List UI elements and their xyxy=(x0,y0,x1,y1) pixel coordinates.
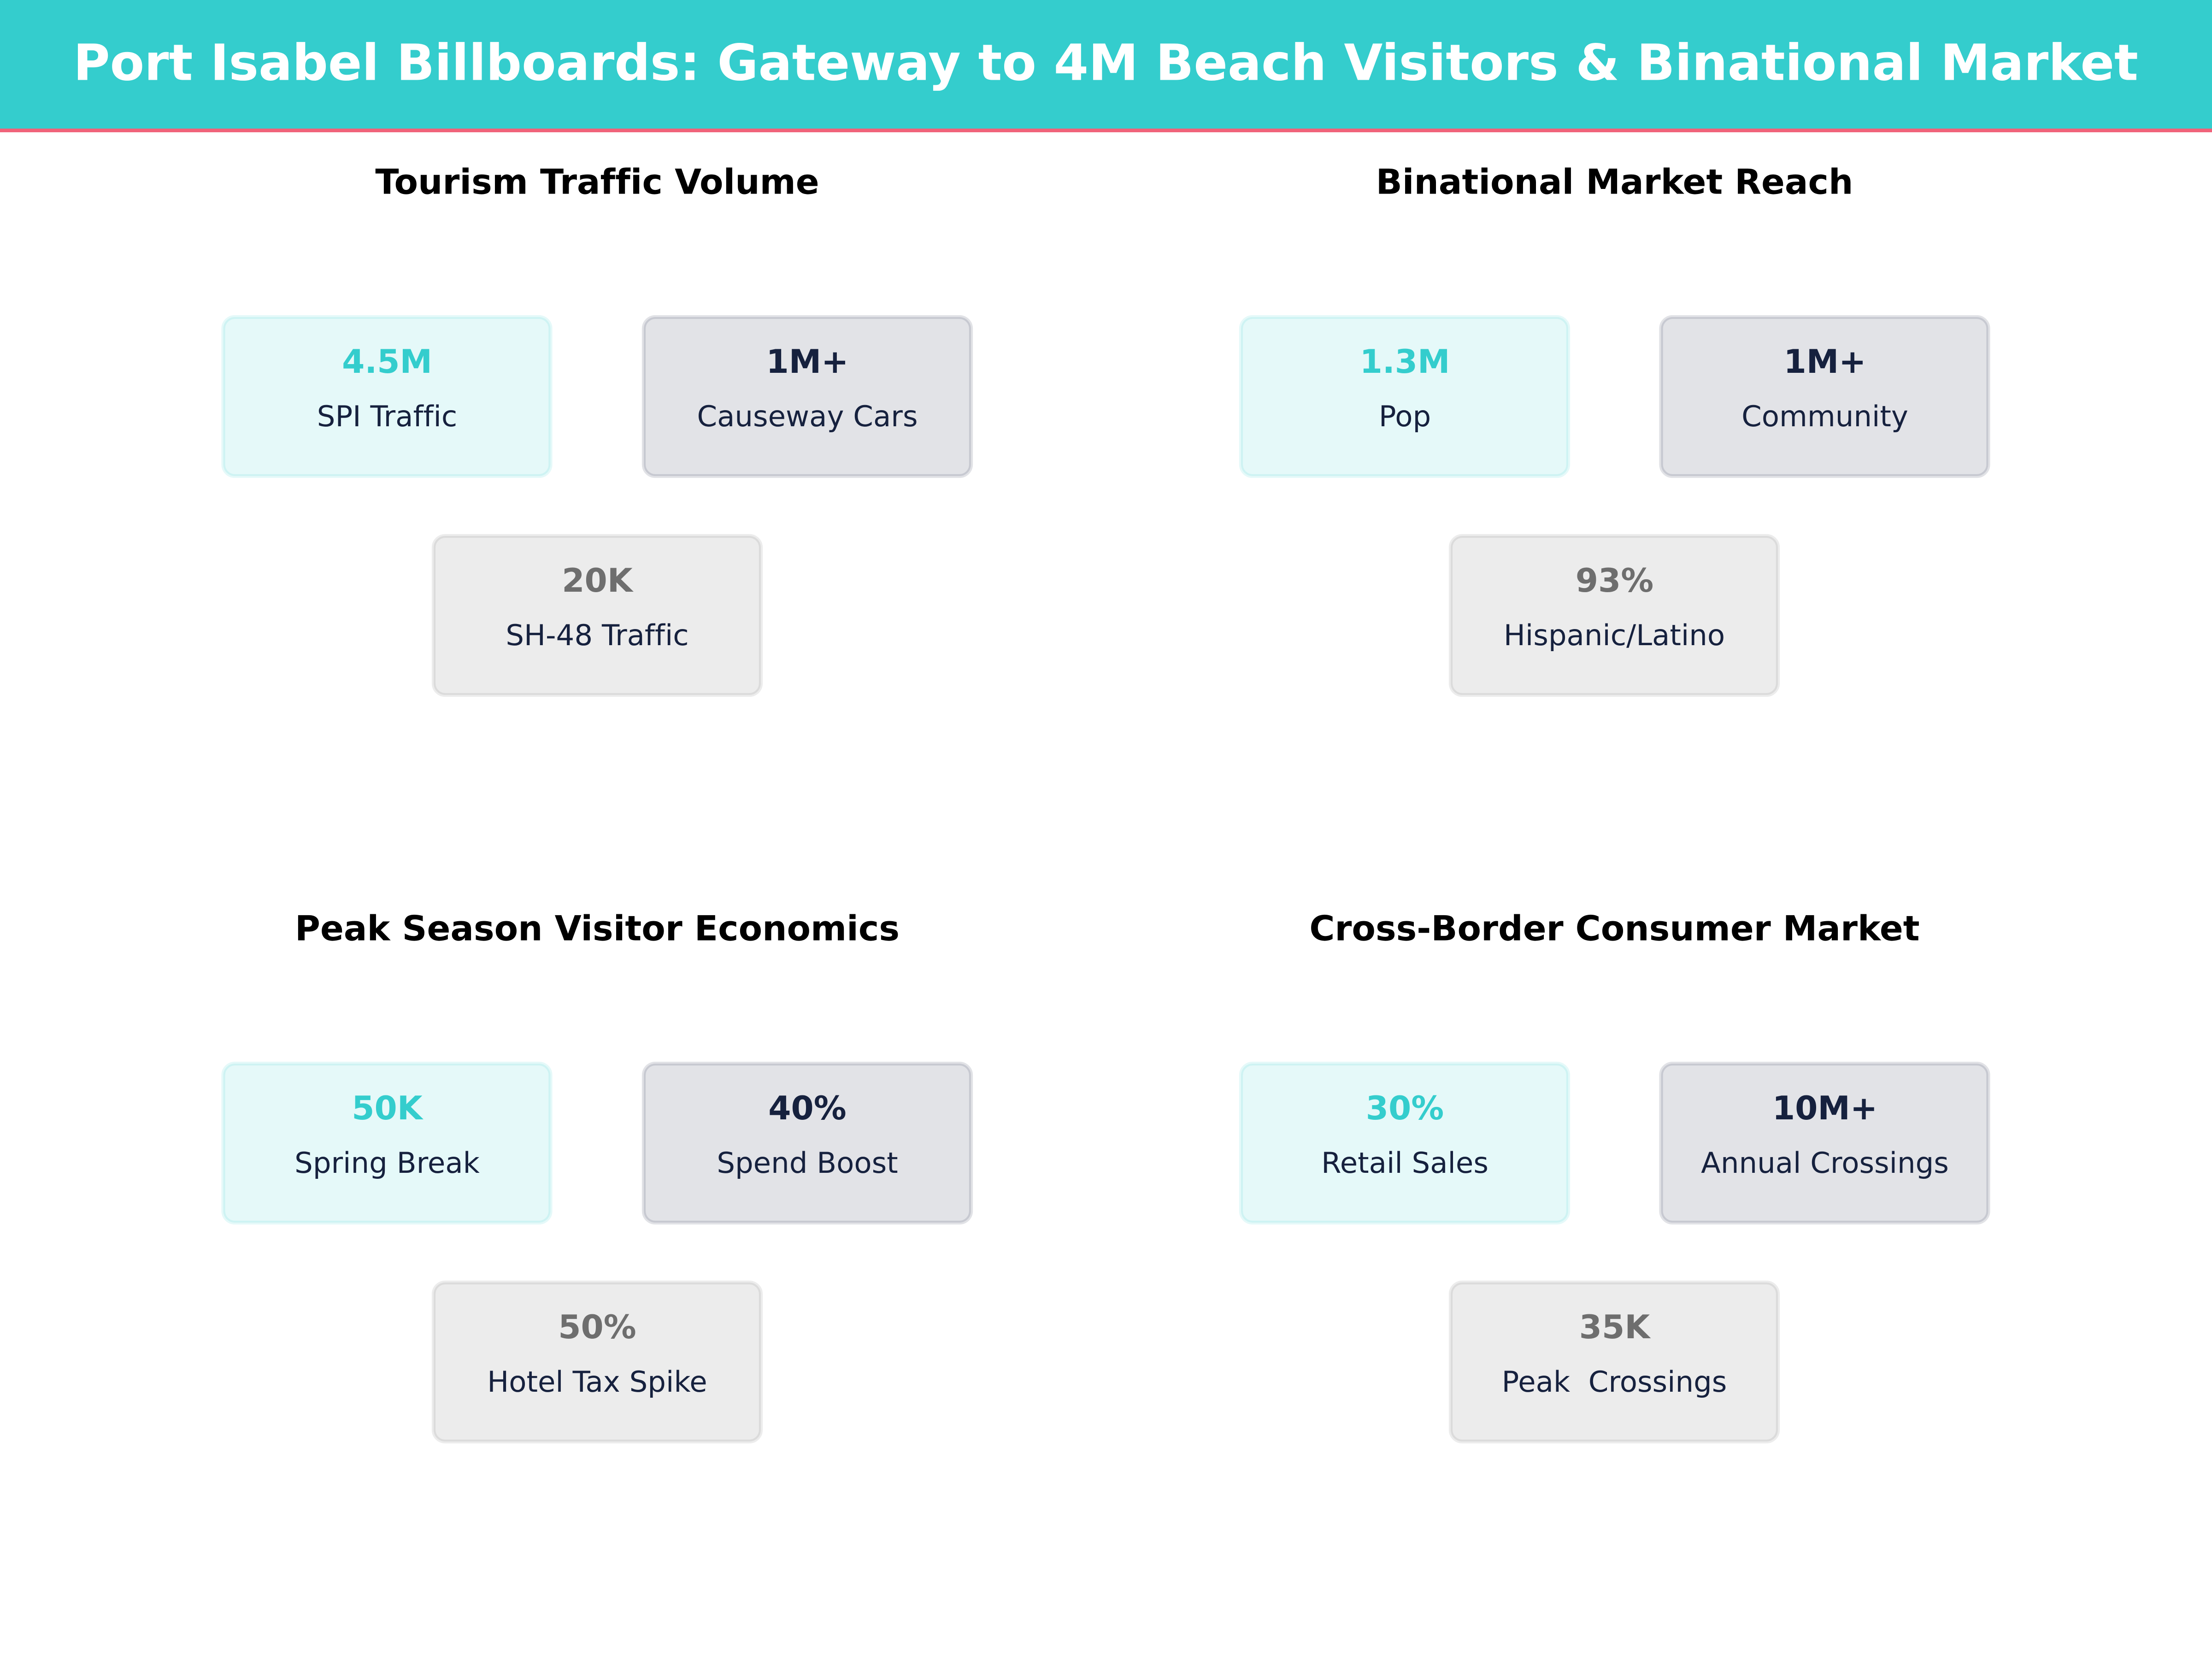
card: retail sales: Retail Sales xyxy=(1321,1146,1488,1180)
card: community: Community xyxy=(1741,400,1908,433)
card: spring break: Spring Break xyxy=(294,1146,480,1180)
heading: peak season visitor economics: Peak Season Visitor Economics xyxy=(295,908,900,949)
card: spring break: 50K xyxy=(352,1089,424,1127)
card: SPI traffic: 4.5M xyxy=(342,342,432,381)
card: hispanic/latino: Hispanic/Latino xyxy=(1504,618,1725,652)
card: SH-48 traffic: 20K xyxy=(562,561,634,600)
card: peak crossings: Peak Crossings xyxy=(1502,1365,1727,1399)
card: annual crossings: 10M+ xyxy=(1772,1089,1877,1127)
panel: peak season visitor economics xyxy=(223,908,971,1441)
panel: binational market reach xyxy=(1241,162,1988,695)
heading: tourism traffic volume: Tourism Traffic Volume xyxy=(375,162,819,202)
card: retail sales: 30% xyxy=(1366,1089,1444,1127)
card: SPI traffic: SPI Traffic xyxy=(317,400,457,433)
panel: cross-border consumer market xyxy=(1241,908,1988,1441)
card: spend boost xyxy=(644,1064,971,1223)
heading: cross-border consumer market: Cross-Border Consumer Market xyxy=(1309,908,1920,949)
card: hotel tax spike xyxy=(434,1282,761,1441)
heading: binational market reach: Binational Market Reach xyxy=(1376,162,1853,202)
title banner xyxy=(0,0,2212,132)
card: SPI traffic xyxy=(223,317,550,476)
card: population: 1.3M xyxy=(1360,342,1450,381)
card: spend boost: Spend Boost xyxy=(717,1146,898,1180)
card: peak crossings xyxy=(1451,1282,1778,1441)
card: population xyxy=(1241,317,1568,476)
card: peak crossings: 35K xyxy=(1579,1308,1651,1346)
card: retail sales xyxy=(1241,1064,1568,1223)
card: SH-48 traffic: SH-48 Traffic xyxy=(506,618,689,652)
card: hispanic/latino xyxy=(1451,536,1778,695)
card: hotel tax spike: 50% xyxy=(558,1308,636,1346)
card: SH-48 traffic xyxy=(434,536,761,695)
card: annual crossings: Annual Crossings xyxy=(1701,1146,1949,1180)
card: causeway cars xyxy=(644,317,971,476)
card: causeway cars: 1M+ xyxy=(766,342,849,381)
card: annual crossings xyxy=(1661,1064,1988,1223)
title: Port Isabel Billboards: Gateway to 4M Beach Visitors & Binational Market xyxy=(73,33,2138,92)
card: community: 1M+ xyxy=(1783,342,1866,381)
card: community xyxy=(1661,317,1988,476)
card: hispanic/latino: 93% xyxy=(1576,561,1653,600)
card: spend boost: 40% xyxy=(768,1089,847,1127)
card: population: Pop xyxy=(1379,400,1431,433)
panel: tourism traffic volume xyxy=(223,162,971,695)
card: causeway cars: Causeway Cars xyxy=(697,400,918,433)
card: hotel tax spike: Hotel Tax Spike xyxy=(487,1365,707,1399)
card: spring break xyxy=(223,1064,550,1223)
